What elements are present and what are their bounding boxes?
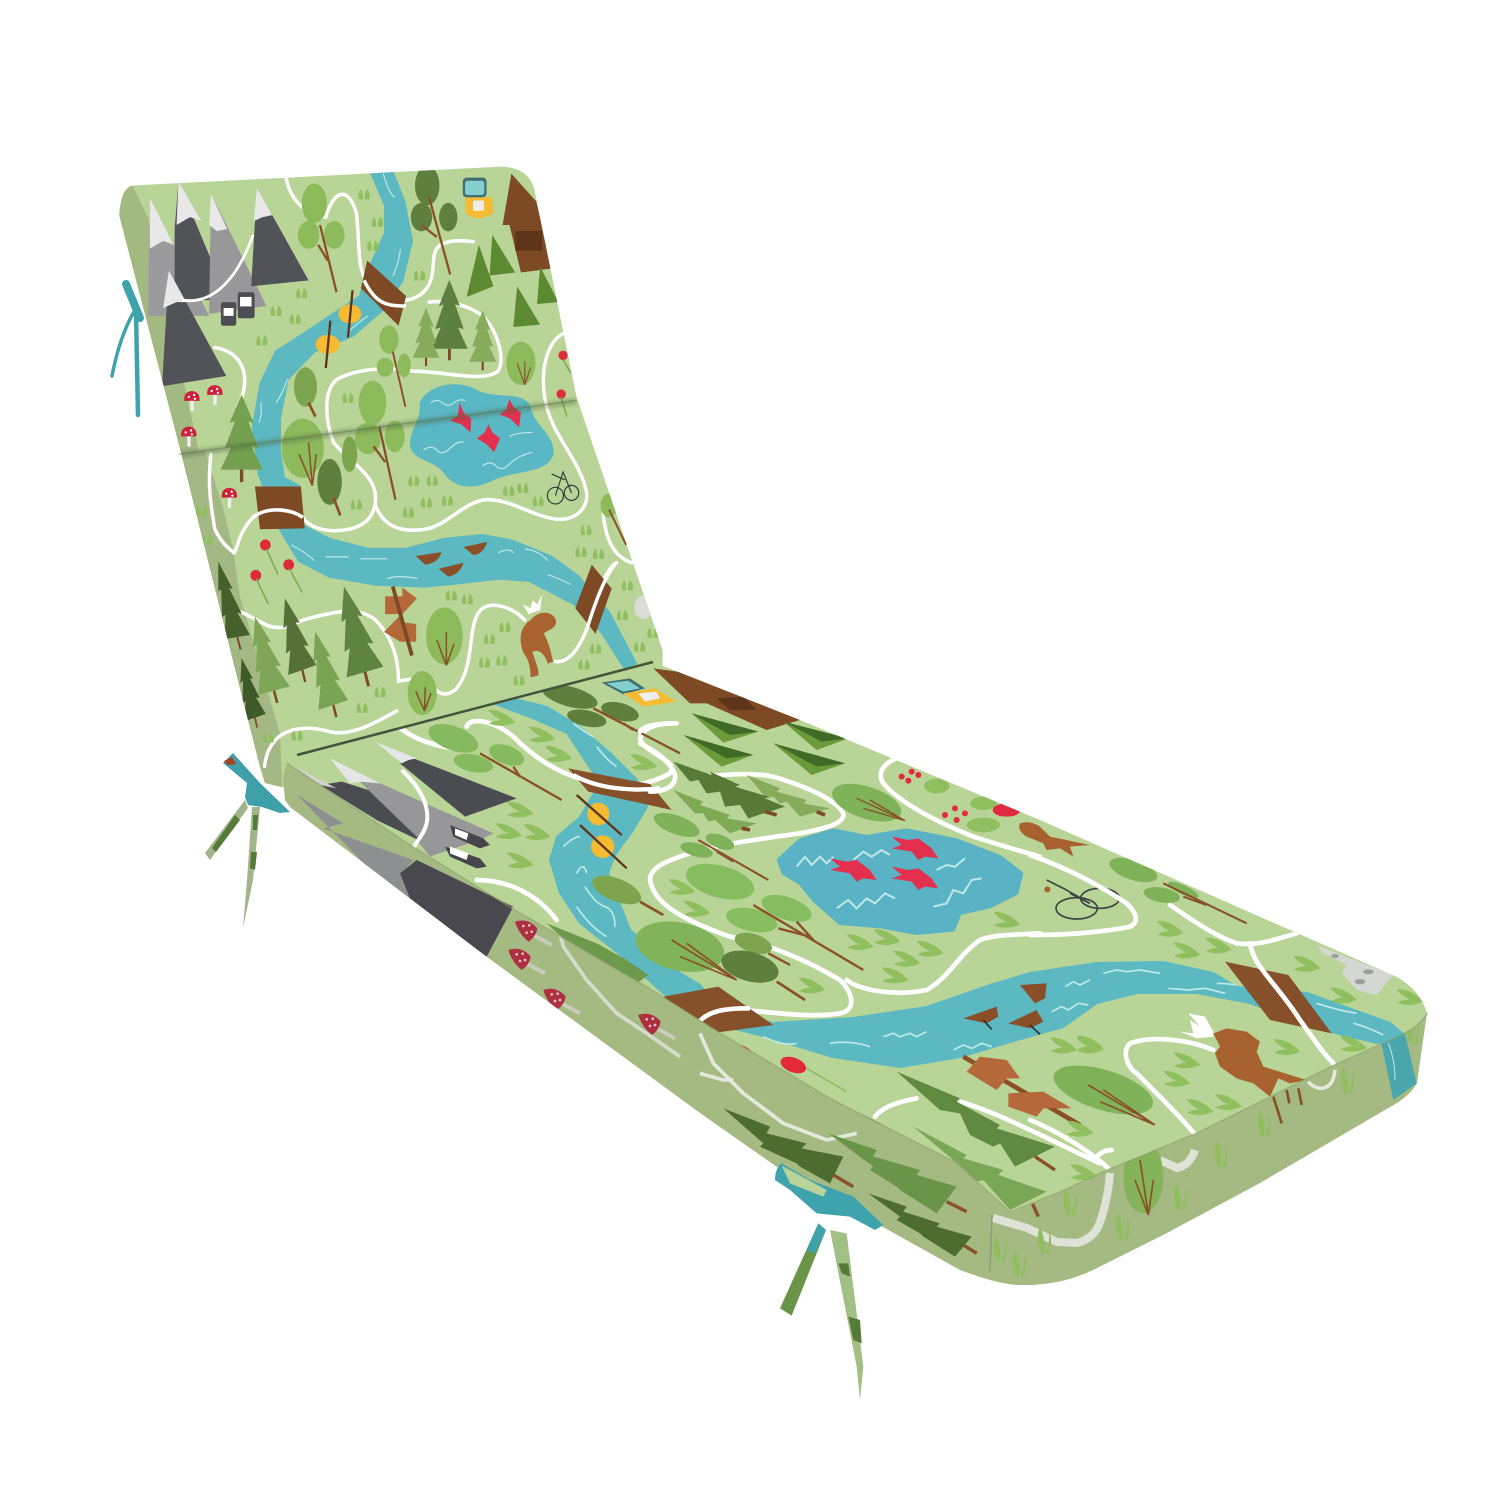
small trees (732, 928, 775, 958)
pine on front lip (547, 923, 648, 993)
mountains (288, 742, 517, 908)
crease shadow between headrest and mid section (178, 401, 576, 455)
trees (282, 166, 626, 715)
water ripples (259, 174, 571, 584)
pond (778, 830, 1022, 933)
dark tree (540, 680, 641, 730)
trails (875, 1098, 1100, 1163)
moose (521, 594, 556, 677)
signpost (963, 1057, 1080, 1125)
stump (1019, 822, 1090, 857)
seam shadow behind seat (297, 662, 653, 755)
pine trees upper (221, 235, 558, 482)
trails (1030, 855, 1333, 1170)
tie: front seat knot and strings (775, 1163, 883, 1400)
river ripples (1052, 970, 1383, 1035)
fish (450, 399, 521, 452)
brush bush (631, 914, 729, 979)
cabin (653, 668, 800, 730)
big pine (897, 1072, 1055, 1167)
back cushion: headrest and mid section (119, 166, 663, 787)
van (463, 178, 493, 218)
panel: shaded left side of mid section (180, 451, 282, 787)
moose (1213, 1028, 1307, 1097)
large tree group (682, 857, 815, 936)
rock (1317, 945, 1393, 995)
mountains on side panel (297, 795, 414, 899)
kayaks (315, 290, 361, 368)
flowers (730, 1042, 847, 1108)
mushrooms on side panel (508, 920, 675, 1038)
trails (640, 723, 1040, 1025)
trail on side panel right (1308, 1070, 1335, 1088)
bicycle (1047, 880, 1119, 919)
signpost (384, 586, 417, 656)
pond (410, 384, 554, 487)
rock (634, 596, 653, 619)
pale pine (913, 1127, 1047, 1210)
cardinals (830, 837, 938, 890)
leaf tufts (1157, 921, 1184, 937)
river on side panel (1382, 1033, 1417, 1100)
boats (416, 542, 487, 577)
seam between headrest and mid section (178, 400, 576, 454)
brush tree (827, 776, 906, 829)
bridge (1225, 962, 1332, 1033)
mushrooms (181, 385, 237, 508)
mountains and cable car (148, 182, 309, 386)
flowers (250, 351, 568, 581)
trails (209, 174, 632, 766)
pine trunk below front edge (1032, 1202, 1038, 1217)
river (253, 168, 636, 667)
tie: left seat knot and strings (205, 753, 290, 928)
panel: back base fabric (119, 167, 663, 787)
two-tone pines (683, 713, 848, 775)
brush tree (1048, 1056, 1159, 1124)
berries (899, 769, 1021, 832)
tree left of pond (651, 808, 736, 861)
kayaks (577, 795, 627, 868)
pond ripples (797, 850, 982, 908)
seat cushion top panel (287, 662, 1427, 1212)
panel: shaded left side of headrest (119, 186, 200, 454)
river (490, 697, 1410, 1067)
firs (673, 762, 830, 833)
tree by river (588, 870, 645, 910)
river ripples (563, 723, 617, 937)
seat cushion side panel (283, 763, 1427, 1285)
cabin (503, 174, 552, 272)
pines on side panel (723, 1108, 843, 1183)
brush tree on side panel (1123, 1150, 1164, 1214)
bridge (663, 987, 773, 1033)
trails on side panel corner (993, 1150, 1195, 1243)
corner seam (990, 1215, 992, 1272)
tie: headrest teal strings (112, 284, 140, 415)
river ripples lower (763, 1032, 992, 1050)
trail on side panel left (558, 936, 681, 1058)
trails (397, 721, 673, 920)
leaf tufts (488, 710, 516, 726)
seat front edge highlight (287, 763, 1427, 1212)
bicycle (547, 472, 579, 504)
van (602, 678, 677, 707)
tree right of pond (1106, 853, 1200, 905)
illustration: chaise lounge cushion with woodland map print (110, 166, 1428, 1400)
bridges (255, 261, 612, 634)
folded pine on front lip (832, 1100, 957, 1173)
leaf tufts (1050, 1038, 1077, 1053)
boats (963, 983, 1047, 1028)
light tree (425, 718, 527, 776)
pine trees lower left (206, 559, 387, 731)
leaf tufts (196, 189, 659, 743)
leaf tufts (668, 879, 696, 895)
trails on side panel front (700, 1033, 857, 1140)
leaf tufts on side panel (1258, 1110, 1271, 1137)
moose legs on side panel (1273, 1088, 1302, 1123)
bridge (568, 768, 672, 810)
